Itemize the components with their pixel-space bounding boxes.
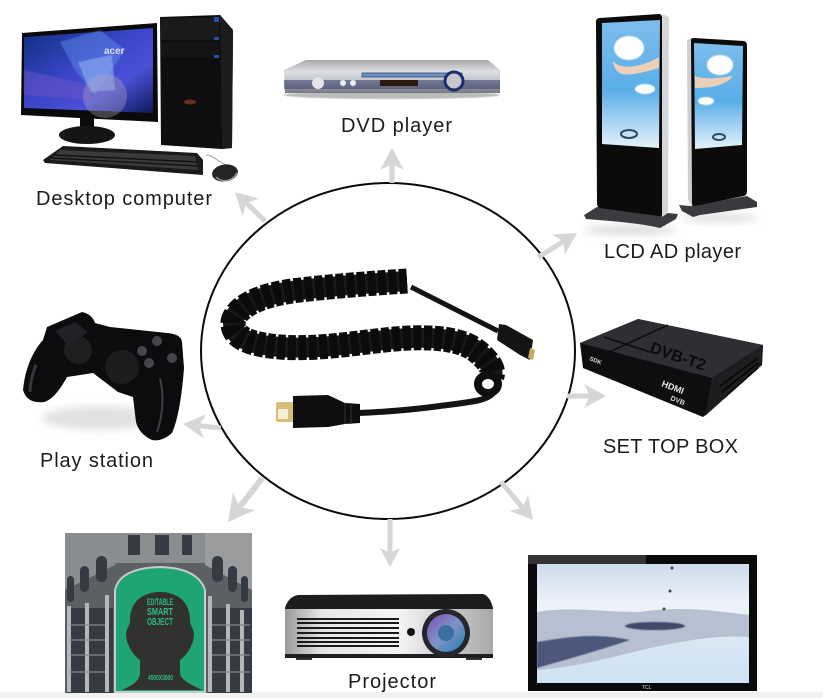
icon: game controller bbox=[23, 312, 184, 440]
mini HDMI plug bbox=[497, 324, 535, 360]
HDMI plug bbox=[276, 395, 360, 428]
arrow: to DVD player bbox=[380, 148, 404, 183]
label: DVD player: DVD player bbox=[341, 115, 452, 137]
billboard text: 4500X3000 bbox=[148, 675, 173, 682]
lens bbox=[422, 609, 470, 657]
icon: DVD player bbox=[284, 60, 500, 99]
label: Projector: Projector bbox=[348, 671, 436, 693]
arrow: to set top box bbox=[567, 384, 606, 408]
small kiosk bbox=[679, 38, 758, 222]
icon: set top box: SDK bbox=[588, 356, 603, 367]
arrow: to LCD AD player bbox=[532, 223, 583, 268]
monitor bbox=[21, 23, 158, 122]
coiled HDMI cable bbox=[233, 281, 535, 428]
tower bbox=[160, 15, 233, 149]
icon: set top box: DVB bbox=[669, 395, 686, 407]
label: LCD AD player: LCD AD player bbox=[604, 241, 741, 263]
keyboard bbox=[43, 146, 203, 175]
image: outdoor billboard on building bbox=[65, 533, 252, 693]
icon: television bbox=[528, 555, 757, 691]
bottom page strip bbox=[0, 692, 823, 698]
label: Play station: Play station bbox=[40, 450, 153, 472]
mouse bbox=[206, 155, 239, 183]
icon: projector bbox=[285, 594, 493, 660]
arrow: to desktop computer bbox=[227, 183, 274, 230]
thin cable to mini HDMI plug bbox=[411, 287, 498, 331]
arrow: to projector bbox=[380, 519, 400, 567]
thin cable to HDMI plug bbox=[358, 392, 494, 413]
water wave bbox=[537, 609, 749, 670]
vents bbox=[297, 619, 399, 646]
monitor stand bbox=[59, 117, 115, 144]
large kiosk bbox=[584, 14, 678, 235]
arrow: to outdoor billboard bbox=[217, 469, 274, 531]
label: SET TOP BOX: SET TOP BOX bbox=[603, 436, 738, 458]
arrow: to television bbox=[492, 474, 542, 528]
billboard text: OBJECT bbox=[147, 617, 173, 628]
billboard panel bbox=[115, 567, 205, 692]
monitor: acer bbox=[104, 46, 125, 57]
icon: desktop computer bbox=[21, 15, 239, 183]
billboard text: EDITABLE bbox=[147, 597, 173, 607]
icon: set top box bbox=[580, 319, 763, 417]
coil core bbox=[233, 281, 492, 376]
coil rings bbox=[233, 281, 492, 376]
icon: television: TCL bbox=[642, 685, 652, 691]
icon: set top box: DVB-T2 bbox=[648, 340, 708, 375]
label: Desktop computer: Desktop computer bbox=[36, 188, 212, 210]
central circle bbox=[201, 183, 575, 519]
billboard text bbox=[147, 597, 173, 682]
icon: set top box: HDMI bbox=[660, 379, 685, 396]
billboard head silhouette bbox=[122, 592, 202, 690]
billboard text: SMART bbox=[147, 607, 173, 618]
icon: LCD AD players bbox=[584, 14, 758, 235]
coil end loop bbox=[478, 375, 498, 393]
arrow: to play station bbox=[182, 412, 222, 440]
building windows bbox=[67, 535, 252, 693]
